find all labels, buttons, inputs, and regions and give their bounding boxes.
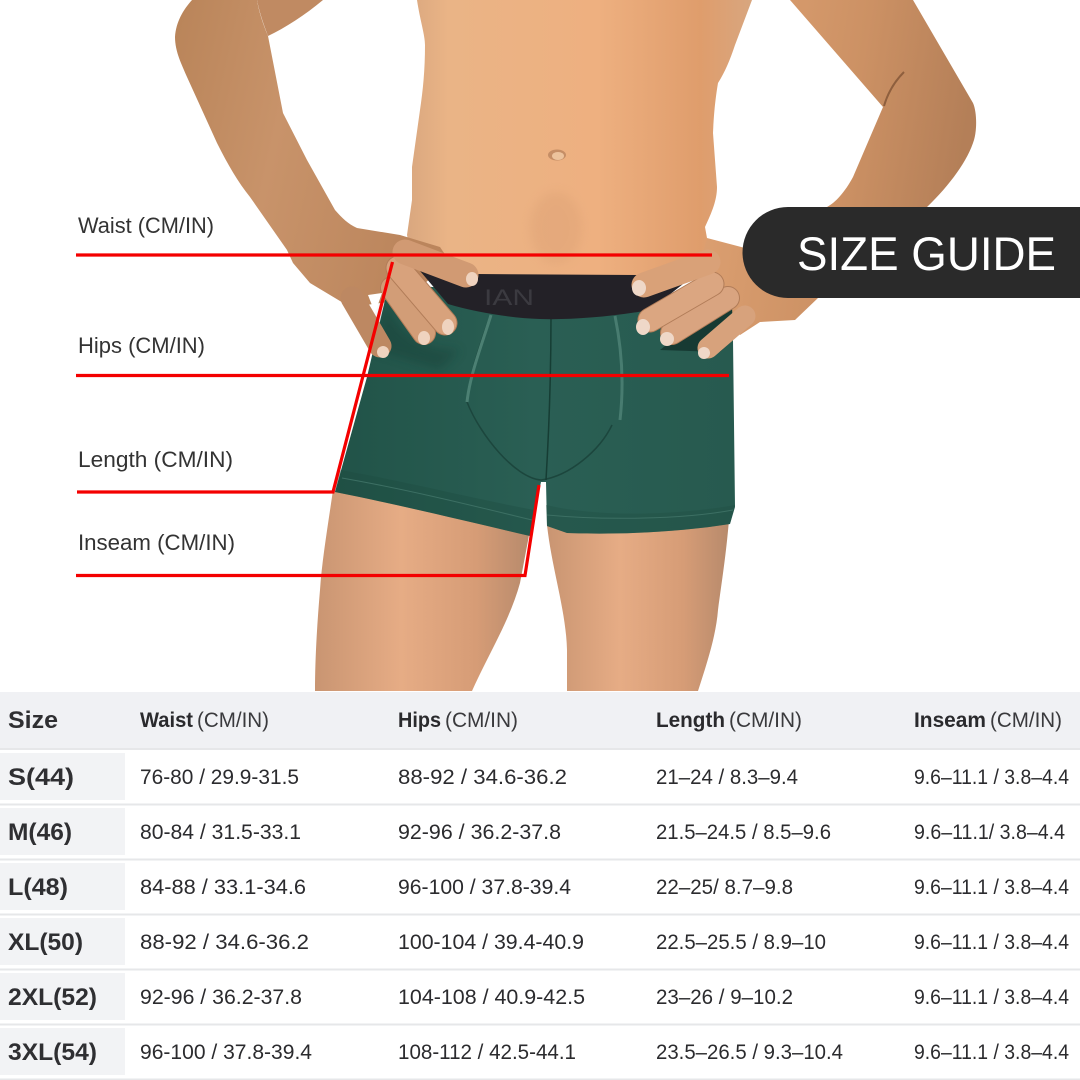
row: 3XL(54): 23.5–26.5 / 9.3–10.4 [656,1040,843,1064]
trunks: green body [335,285,735,536]
row: M(46): 9.6–11.1/ 3.8–4.4 [914,820,1065,844]
row: M(46): 21.5–24.5 / 8.5–9.6 [656,820,831,844]
row: XL(50): XL(50) [8,929,83,956]
model figure [175,0,976,691]
label: waist: Waist (CM/IN) [78,213,214,238]
trunks: hem stitching left [342,478,532,520]
row: L(48): 22–25/ 8.7–9.8 [656,875,793,899]
row: 3XL(54): 3XL(54) [8,1039,97,1066]
right hand nails [632,280,710,359]
navel [548,150,566,160]
measurement lines [76,255,729,576]
row: L(48) [8,874,1069,901]
row: XL(50): 100-104 / 39.4-40.9 [398,930,584,954]
thigh: left [315,490,530,691]
row: 2XL(52): 104-108 / 40.9-42.5 [398,985,585,1009]
row: 3XL(54) [8,1039,1069,1066]
left upper arm [257,0,323,36]
table header: Inseam [914,709,986,732]
title badge [742,207,1080,298]
row: S(44): 76-80 / 29.9-31.5 [140,765,299,789]
arm crease [884,72,904,106]
row: 2XL(52): 2XL(52) [8,984,97,1011]
table header: (CM/IN) [729,709,802,732]
table header: Length [656,709,725,732]
abdomen hair shading [530,192,582,264]
title: SIZE GUIDE [797,227,1056,280]
measurement labels [78,213,235,555]
row: M(46): 92-96 / 36.2-37.8 [398,820,561,844]
table header: Waist [140,709,193,732]
hips line [76,374,729,377]
left hand fingers [352,252,466,346]
label: length: Length (CM/IN) [78,447,233,472]
row: 2XL(52): 92-96 / 36.2-37.8 [140,985,302,1009]
row: 2XL(52) [8,984,1069,1011]
label: hips: Hips (CM/IN) [78,333,205,358]
trunks: hip shadow right [660,308,733,352]
size table [0,692,1080,1080]
left arm and hand back [175,0,450,307]
inseam line [76,485,539,576]
row: L(48): L(48) [8,874,68,901]
trunks: pouch seam [467,316,612,480]
right hand fingers [644,262,745,348]
row: XL(50): 88-92 / 34.6-36.2 [140,930,309,954]
row: L(48): 84-88 / 33.1-34.6 [140,875,306,899]
thigh: right [547,520,729,691]
gap between fingers [368,293,382,313]
trunks: leg hem shading [335,470,534,536]
row: S(44): 88-92 / 34.6-36.2 [398,765,567,789]
label: inseam: Inseam (CM/IN) [78,530,235,555]
trunks: hip shadow left [375,302,460,370]
row: S(44) [8,764,1069,791]
row: S(44): S(44) [8,764,74,791]
row: M(46): M(46) [8,819,72,846]
table header: (CM/IN) [197,709,269,732]
waistband [415,265,697,319]
table header: Size [8,707,58,734]
row: M(46) [8,819,1065,846]
row: M(46): 80-84 / 31.5-33.1 [140,820,301,844]
length line [77,262,392,492]
waistband logo: IAN [484,285,534,310]
row: 3XL(54): 96-100 / 37.8-39.4 [140,1040,312,1064]
row: 3XL(54): 108-112 / 42.5-44.1 [398,1040,576,1064]
row: XL(50): 22.5–25.5 / 8.9–10 [656,930,826,954]
table header: Hips [398,709,441,732]
right arm and hand back [700,0,976,335]
row: S(44): 21–24 / 8.3–9.4 [656,765,798,789]
trunks: hem stitching right [547,510,733,518]
row: 2XL(52): 23–26 / 9–10.2 [656,985,793,1009]
row: XL(50) [8,929,1069,956]
table header: (CM/IN) [990,709,1062,732]
table header [0,692,1080,749]
table header: (CM/IN) [445,709,518,732]
trunks: left stitched seam [467,315,491,402]
trunks: right hem shading [546,505,735,534]
trunks: centre seam [546,316,551,480]
torso [407,0,752,280]
waist line [76,253,712,257]
row: L(48): 96-100 / 37.8-39.4 [398,875,571,899]
trunks: right stitched seam [615,316,622,420]
left hand nails [377,272,478,358]
